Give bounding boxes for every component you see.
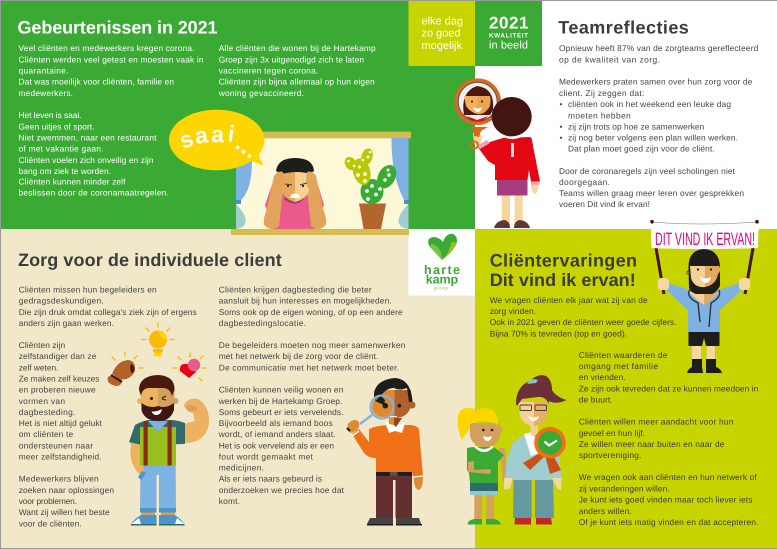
text block: experiences: Of je kunt iets matig vinden en dat accepteren. xyxy=(579,517,758,527)
text block: left column: Het leven is saai. xyxy=(18,110,82,120)
illustration: strong man with beard xyxy=(129,375,209,526)
text block: right column: fout wordt gemaakt met xyxy=(219,452,314,462)
text block: right column: Cliënten krijgen dagbesteding die beter xyxy=(219,284,372,294)
text block: right column: Als er iets naars gebeurd is xyxy=(219,474,322,484)
text block: right column: De communicatie met het netwerk moet beter. xyxy=(219,362,399,372)
text block: left column xyxy=(18,43,204,198)
box: 2021 kwaliteit in beeld: 2021 xyxy=(489,14,528,32)
heading: Zorg voor de individuele client: Zorg voor de individuele client xyxy=(18,250,282,270)
text block: experiences: We vragen ook aan cliënten en hun netwerk of xyxy=(579,472,757,482)
text block: left column: bang om ziek te worden. xyxy=(18,166,111,176)
text block: left column: zelf weten. xyxy=(19,362,58,372)
icon: heart xyxy=(173,353,206,381)
text block: intro: Bijna 70% is tevreden (top en goed). xyxy=(490,328,627,338)
text block: experiences: de buurt. xyxy=(579,394,613,404)
text block: Teamreflecties body xyxy=(559,43,759,209)
heading: Cliëntervaringen Dit vind ik ervan: Cliëntervaringen xyxy=(490,250,637,270)
text block: left column: zoeken naar oplossingen xyxy=(19,485,114,495)
text block: experiences xyxy=(579,350,759,527)
text block: right column xyxy=(218,284,406,506)
panel: Gebeurtenissen in 2021 xyxy=(0,0,475,235)
text block: right column: wordt, of iemand anders slaat. xyxy=(218,429,336,439)
heading: Cliëntervaringen Dit vind ik ervan xyxy=(490,250,637,290)
illustration: man with magnifying glass xyxy=(347,378,423,526)
text block: right column: Alle cliënten die wonen bij de Hartekamp xyxy=(219,43,376,53)
panel: Zorg voor de individuele client xyxy=(0,229,475,549)
text block: left column: of met vakantie gaan. xyxy=(18,144,104,154)
text block: right column: woning gevaccineerd. xyxy=(218,88,304,98)
logo wordmark: harte xyxy=(424,263,460,277)
text block: Teamreflecties body: • xyxy=(560,122,562,132)
text block: left column: Want zij willen het beste xyxy=(19,507,110,517)
text block: right column: Het is ook vervelend als er een xyxy=(219,440,334,450)
text block: right column: onderzoeken we precies hoe dat xyxy=(219,485,345,495)
text block: left column: Het is niet altijd gelukt xyxy=(19,418,103,428)
text block: left column: Geen uitjes of sport. xyxy=(18,122,94,132)
text block: left column: Cliënten missen hun begeleiders en xyxy=(19,284,157,294)
illustration: girl holding banner xyxy=(650,220,759,373)
text block: left column: zelfstandiger dan ze xyxy=(19,351,97,361)
text block: Teamreflecties body: • xyxy=(560,99,562,109)
text block: experiences: omgang met familie xyxy=(579,361,658,371)
text block: right column: werken bij de Hartekamp Groep. xyxy=(218,396,342,406)
panel: Teamreflecties xyxy=(475,0,777,229)
text block: right column: Bijvoorbeeld als iemand boos xyxy=(219,418,333,428)
callout: saai speech bubble: saai... xyxy=(176,120,265,163)
text block: Teamreflecties body: Door de coronaregels zijn veel scholingen niet xyxy=(559,166,736,176)
text block: left column: Cliënten zijn xyxy=(19,340,66,350)
text block: Teamreflecties body: • xyxy=(560,132,562,142)
text block: left column: Die zijn druk omdat collega's ziek zijn of ergens xyxy=(19,307,197,317)
text block: left column: ondersteunen naar xyxy=(19,440,93,450)
callout: saai speech bubble xyxy=(169,110,265,170)
text block: Teamreflecties body: client. Zij zeggen dat: xyxy=(559,88,644,98)
text block: left column: en proberen nieuwe xyxy=(19,384,96,394)
heading: Teamreflecties: Teamreflecties xyxy=(558,18,689,38)
text block: experiences: Cliënten willen meer aandacht voor hun xyxy=(579,417,734,427)
logo wordmark: kamp xyxy=(426,273,459,287)
logo wordmark: groep xyxy=(434,286,448,290)
illustration: woman looking in hand mirror xyxy=(454,78,540,228)
text block: right column: De begeleiders moeten nog meer samenwerken xyxy=(219,340,406,350)
text block: left column: voor problemen. xyxy=(19,496,77,506)
text block: right column: met het netwerk bij de zorg voor de cliënt. xyxy=(219,351,378,361)
text block: experiences: Cliënten waarderen de xyxy=(579,350,668,360)
text block: right column xyxy=(218,43,376,98)
text block: experiences: Ze zijn ook tevreden dat ze kunnen meedoen in xyxy=(579,384,759,394)
text block: left column: gedragsdeskundigen. xyxy=(19,296,104,306)
text block: left column: Medewerkers blijven xyxy=(19,474,99,484)
text block: Teamreflecties body: Dat plan moet goed zijn voor de cliënt. xyxy=(568,144,715,154)
text block: left column: meer zelfstandigheid. xyxy=(19,452,102,462)
text block: right column: Cliënten kunnen veilig wonen en xyxy=(219,384,344,394)
heading: Gebeurtenissen in 2021: Gebeurtenissen in 2021 xyxy=(18,17,218,37)
box: elke dag zo goed mogelijk: elke dag xyxy=(422,16,463,28)
icon: light bulb xyxy=(142,323,174,356)
icon: Hartekamp heart logo xyxy=(428,234,457,260)
panel: Cliëntervaringen xyxy=(458,220,777,549)
text block: Teamreflecties body: Teams willen graag meer leren over gesprekken xyxy=(559,188,744,198)
text block: right column: aansluit bij hun interesses en mogelijkheden. xyxy=(219,296,392,306)
illustration: woman with rosette and girl xyxy=(458,375,567,524)
box: elke dag zo goed mogelijk: mogelijk xyxy=(422,40,462,52)
text block: experiences: en vrienden. xyxy=(579,372,626,382)
text block: right column: vaccineren tegen corona. xyxy=(219,66,318,76)
text block: right column: medicijnen. xyxy=(219,462,264,472)
text block: right column: komt. xyxy=(219,496,240,506)
text block: left column: dagbesteding. xyxy=(19,407,75,417)
box: 2021 kwaliteit in beeld xyxy=(475,0,542,66)
text block: left column: anders zijn gaan werken. xyxy=(19,318,114,328)
text block: Teamreflecties body: cliënten ook in het weekend een leuke dag xyxy=(568,99,731,109)
text block: right column: Soms ook op de eigen woning, of op een andere xyxy=(219,307,403,317)
text block: intro: zorg vinden. xyxy=(490,306,536,316)
text block: experiences: Ze willen meer naar buiten en naar de xyxy=(579,439,725,449)
text block: intro: Ook in 2021 geven de cliënten weer goede cijfers. xyxy=(490,317,676,327)
text block: experiences: sportvereniging. xyxy=(579,450,641,460)
text block: left column: Ze maken zelf keuzes xyxy=(19,374,99,384)
text block: Teamreflecties body: op de kwaliteit van zorg. xyxy=(559,54,660,64)
text block: left column xyxy=(19,284,197,528)
box: 2021 kwaliteit in beeld: KWALITEIT xyxy=(489,33,528,40)
text block: right column: Cliënten zijn bijna allemaal op hun eigen xyxy=(219,76,375,86)
text block: left column: beslissen door de coronamaatregelen. xyxy=(18,188,169,198)
text block: left column: Cliënten kunnen minder zelf xyxy=(18,176,126,186)
text block: left column: Dat was moeilijk voor cliënten, familie en xyxy=(18,76,174,86)
text block: intro: We vragen cliënten elk jaar wat zij van de xyxy=(490,295,648,305)
text block: left column: Niet zwemmen, naar een restaurant xyxy=(18,132,157,142)
text block: experiences: gevoel en hun lijf. xyxy=(579,428,645,438)
text block: Teamreflecties body: zij zijn trots op hoe ze samenwerken xyxy=(568,122,705,132)
icon: boxing glove xyxy=(108,352,143,386)
text block: left column: Cliënten voelen zich onveilig en zijn xyxy=(18,155,154,165)
text block: left column: medewerkers. xyxy=(18,88,73,98)
text block: right column: Soms gebeurt er iets vervelends. xyxy=(219,407,343,417)
text block: right column: dagbestedingslocatie. xyxy=(219,318,306,328)
text block: Teamreflecties body: zij nog beter volgens een plan willen werken. xyxy=(568,132,738,142)
text block: experiences: zij veranderingen willen. xyxy=(579,484,670,494)
panel: logo box xyxy=(408,229,475,296)
text block: Teamreflecties body: moeten hebben xyxy=(568,110,631,120)
box: elke dag zo goed mogelijk xyxy=(408,0,475,66)
logo wordmark xyxy=(424,263,460,290)
text block: left column: om cliënten te xyxy=(19,429,74,439)
text block: left column: Veel cliënten en medewerkers kregen corona. xyxy=(18,43,194,53)
heading: Cliëntervaringen Dit vind ik ervan: Dit vind ik ervan! xyxy=(490,270,636,290)
text block: left column: quarantaine. xyxy=(18,66,68,76)
text block: Teamreflecties body: doorgegaan. xyxy=(559,177,610,187)
box: elke dag zo goed mogelijk: zo goed xyxy=(422,28,460,40)
illustration: bored man at window with cactus xyxy=(231,132,411,235)
text block: left column: voor de cliënten. xyxy=(19,518,82,528)
text block: intro xyxy=(490,295,676,338)
text block: experiences: anders willen. xyxy=(579,506,632,516)
text block: right column: Groep zijn 3x uitgenodigd zich te laten xyxy=(219,54,364,64)
box: 2021 kwaliteit in beeld: in beeld xyxy=(489,40,528,52)
text block: Teamreflecties body: Medewerkers praten samen over hun zorg voor de xyxy=(559,76,753,86)
text block: experiences: Je kunt iets goed vinden maar toch liever iets xyxy=(579,494,752,504)
text block: Teamreflecties body: Opnieuw heeft 87% van de zorgteams gereflecteerd xyxy=(559,43,759,53)
text block: left column: Cliënten werden veel getest en moesten vaak in xyxy=(18,54,204,64)
text block: Teamreflecties body: voeren Dit vind ik ervan! xyxy=(559,199,650,209)
text block: left column: vormen van xyxy=(19,396,65,406)
